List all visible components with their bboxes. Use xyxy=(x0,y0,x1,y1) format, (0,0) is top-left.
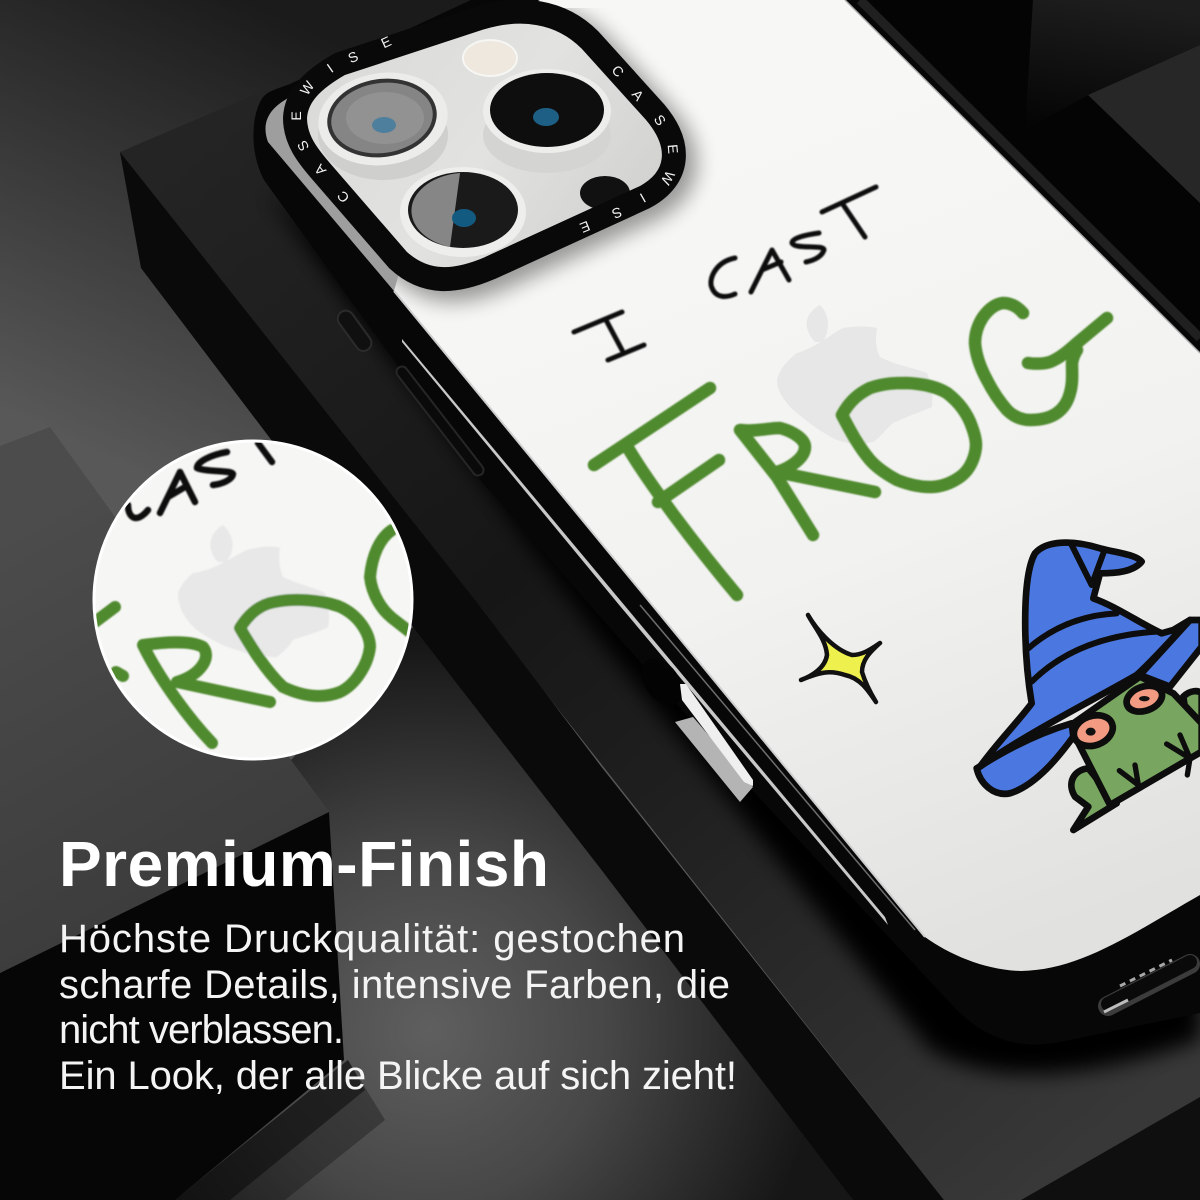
magnified apple logo xyxy=(178,525,329,657)
CASEWISE ring lettering: S xyxy=(345,48,361,66)
CASEWISE ring lettering: S xyxy=(651,112,669,128)
panel edge highlight xyxy=(394,291,925,937)
camera bumper xyxy=(265,12,682,291)
plinth shadow falloff inner xyxy=(175,1060,365,1200)
CASEWISE ring lettering: S xyxy=(294,138,312,154)
phone case body xyxy=(253,0,1200,1045)
frog body xyxy=(1073,677,1200,805)
silver power button xyxy=(675,717,753,802)
body copy: Ein Look, der alle Blicke auf sich zieht! xyxy=(59,1054,737,1098)
floor corner xyxy=(1021,1097,1200,1200)
frog right arm xyxy=(1183,691,1200,723)
plinth front face xyxy=(0,812,344,1200)
floor light xyxy=(100,627,853,1200)
body copy xyxy=(59,917,737,1098)
top edge highlight xyxy=(845,0,1200,353)
frog back leg xyxy=(1071,768,1117,830)
hand lettering: FROG xyxy=(594,303,1107,595)
magnified I CAST xyxy=(128,443,272,518)
CASEWISE ring lettering: E xyxy=(378,33,394,51)
inner bevel line xyxy=(640,605,915,930)
plinth top surface xyxy=(0,427,329,973)
CASEWISE ring lettering: A xyxy=(629,86,648,104)
flash xyxy=(463,40,517,76)
CASEWISE ring lettering: W xyxy=(657,168,678,188)
frog eyes xyxy=(1070,710,1117,751)
title: Premium-Finish xyxy=(59,828,549,900)
upper-right lens xyxy=(483,69,611,173)
CASEWISE ring lettering: E xyxy=(288,111,304,121)
plinth shadow falloff xyxy=(175,1060,385,1200)
side buttons xyxy=(335,307,1190,1012)
magnified artwork xyxy=(95,443,410,743)
lower lens xyxy=(400,167,526,257)
body copy: Höchste Druckqualität: gestochen xyxy=(59,917,685,961)
silver bevel line xyxy=(402,339,888,925)
CASEWISE ring lettering xyxy=(288,33,681,236)
hat folds xyxy=(1028,545,1157,682)
magnifier circle callout xyxy=(93,440,413,760)
top right edge xyxy=(860,0,1200,338)
CASEWISE ring lettering: E xyxy=(665,144,681,154)
hand lettering: I CAST xyxy=(574,187,876,360)
bumper gray sliver xyxy=(265,76,400,291)
button recess xyxy=(633,651,691,713)
upper plinth side face xyxy=(120,152,944,1200)
ring lower arc over hole xyxy=(490,197,645,268)
CASEWISE ring lettering: I xyxy=(637,190,649,206)
CASEWISE ring lettering: W xyxy=(297,77,318,98)
magnified FROG xyxy=(95,530,410,743)
hat under-brim left xyxy=(977,723,1073,794)
CASEWISE ring lettering: A xyxy=(310,161,329,179)
CASEWISE ring lettering: E xyxy=(578,218,592,236)
CASEWISE ring lettering: C xyxy=(334,188,352,206)
sparkle star xyxy=(801,615,880,702)
body copy: nicht verblassen. xyxy=(59,1008,344,1052)
bumper shadow xyxy=(303,20,682,287)
wizard frog illustration xyxy=(977,543,1200,830)
charging port xyxy=(1108,964,1190,1006)
CASEWISE ring lettering: I xyxy=(324,60,336,76)
magnifier white border xyxy=(94,441,412,759)
hat under-brim right xyxy=(1140,620,1200,687)
body copy: scharfe Details, intensive Farben, die xyxy=(59,963,730,1007)
frog mouth marks xyxy=(1119,735,1190,785)
volume button xyxy=(402,372,478,470)
apple logo emboss xyxy=(777,305,932,444)
silent switch xyxy=(335,307,375,354)
phone shadow xyxy=(265,190,1200,1074)
camera hole xyxy=(580,176,630,210)
CASEWISE ring lettering: S xyxy=(610,204,624,222)
CASEWISE ring lettering: C xyxy=(609,62,627,80)
bumper ring and glass xyxy=(295,12,674,279)
hat xyxy=(980,543,1190,767)
lower plinth xyxy=(0,427,853,1200)
upper-left lens xyxy=(312,64,454,180)
phone white back panel xyxy=(330,0,1200,971)
